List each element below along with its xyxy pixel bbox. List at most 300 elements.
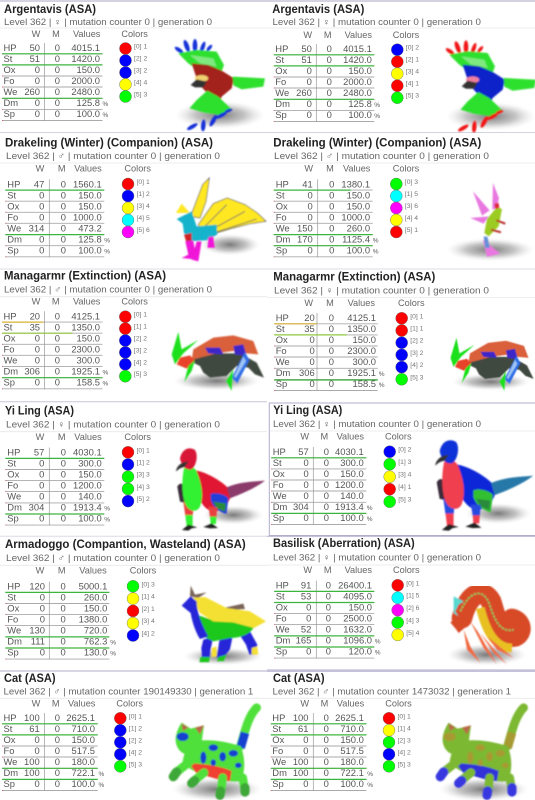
stats table: 150.0 (72, 734, 95, 745)
colour swatches: [1] 2 (136, 191, 150, 198)
panel: Armadoggo, male, left column (0, 536, 267, 670)
stats table: 1913.4 (335, 501, 364, 512)
colour swatches: [0] 1 (134, 312, 147, 319)
stats table: 0 (40, 647, 45, 658)
stats table (5, 581, 116, 660)
column headers: Colors (130, 566, 157, 576)
stats table: % (379, 371, 385, 378)
stats table: 0 (61, 211, 66, 222)
stats table: % (102, 380, 108, 387)
stats table: 170 (297, 233, 313, 244)
stats table: 0 (60, 614, 66, 625)
colour swatches: [5] 3 (398, 761, 411, 768)
stats table: 0 (55, 321, 60, 332)
column headers: Values (73, 29, 101, 39)
title: Yi Ling (ASA) (5, 405, 74, 417)
stats table: 0 (303, 490, 309, 501)
stats table: 0 (55, 53, 60, 64)
level line: Level 362 | ♂ | mutation counter 0 | generation 0 (4, 284, 212, 294)
stats table (5, 447, 110, 526)
stats table: 0 (309, 334, 315, 345)
stats table: 150.0 (349, 602, 372, 613)
stats table: % (367, 516, 373, 523)
stats table: 0 (39, 200, 44, 211)
stats table: 165 (296, 635, 311, 646)
stats table: % (102, 101, 108, 108)
stats table: 517.5 (340, 745, 364, 756)
stats table: 0 (60, 636, 66, 647)
stats table: 50 (301, 43, 312, 54)
stats table: 0 (303, 745, 308, 756)
stats table: 0 (61, 458, 66, 469)
stats table: Fo (276, 613, 287, 624)
stats table: 57 (298, 446, 309, 457)
stats table: 0 (329, 378, 334, 389)
stats table: 0 (39, 189, 44, 200)
stats table: 100.0 (340, 512, 364, 523)
colour swatches: [2] 2 (410, 338, 424, 345)
colour swatches: [0] 2 (398, 447, 412, 454)
stats table: 150.0 (340, 468, 364, 479)
column headers: Values (343, 164, 371, 174)
stats table: 0 (39, 513, 44, 524)
stats table: 2625.1 (66, 712, 95, 723)
stats table: 0 (324, 767, 329, 778)
stats table: We (275, 87, 289, 98)
stats table: 0 (303, 512, 309, 523)
panel: Cat, male, left column (0, 670, 267, 800)
stats table: 300.0 (77, 354, 100, 365)
colour swatches: [0] 1 (129, 713, 142, 720)
stats table: We (276, 624, 290, 635)
stats table: 0 (55, 376, 60, 387)
column headers: Colors (398, 298, 425, 308)
stats table: 0 (35, 108, 40, 119)
stats table: % (102, 112, 108, 119)
stats table: 0 (60, 592, 66, 603)
column headers (304, 298, 425, 308)
colour swatches (390, 178, 418, 238)
stats table: 150.0 (340, 734, 364, 745)
stats table: 0 (55, 64, 60, 75)
column headers: W (303, 565, 312, 575)
column headers: M (52, 699, 60, 709)
stats table: 0 (329, 211, 334, 222)
stats table: 35 (30, 321, 40, 332)
stats table: Fo (4, 75, 14, 86)
panel: Drakeling, male, right column (267, 133, 535, 267)
stats table: 0 (34, 734, 40, 745)
column headers: Values (337, 699, 365, 709)
stats table: Sp (276, 646, 287, 657)
stats table: % (104, 237, 110, 244)
stats table: 2000.0 (71, 75, 100, 86)
stats table: 0 (34, 778, 40, 789)
stats table: 0 (61, 502, 66, 513)
stats table: 2625.1 (335, 712, 364, 723)
colour swatches: [5] 3 (129, 761, 142, 768)
column headers (32, 297, 148, 307)
stats table: 150.0 (347, 200, 370, 211)
stats table: 100 (24, 756, 40, 767)
creature render: Argentavis (174, 39, 265, 132)
colour swatches: [3] 4 (136, 203, 150, 210)
column headers (304, 164, 420, 174)
stats table: We (4, 354, 17, 365)
column headers: Values (345, 565, 372, 575)
stats table: 2300.0 (347, 345, 376, 356)
stats table: 0 (35, 75, 40, 86)
stats table: 0 (39, 233, 44, 244)
colour swatches (119, 311, 147, 382)
column headers: Values (348, 298, 375, 308)
column headers (36, 432, 151, 442)
stats table: 0 (55, 756, 60, 767)
stats table: 0 (55, 310, 60, 321)
level line: Level 362 | ♀ | mutation counter 0 | generation 0 (272, 17, 481, 27)
colour swatches (391, 44, 419, 104)
colour swatches: [2] 1 (406, 57, 419, 64)
stats table: 53 (301, 591, 311, 602)
stats table: We (7, 222, 21, 233)
stats table: St (7, 592, 17, 603)
stats table: 0 (39, 458, 44, 469)
stats table: 0 (324, 712, 329, 723)
stats table: 0 (61, 447, 66, 458)
column headers: Values (74, 164, 102, 174)
stats table: 722.1 (72, 767, 95, 778)
stats table: 0 (309, 356, 315, 367)
stats table: 4030.1 (73, 447, 102, 458)
colour swatches: [0] 1 (136, 179, 150, 186)
stats table: 120.0 (349, 646, 372, 657)
stats table: 57 (34, 447, 44, 458)
stats table: 150.0 (78, 200, 102, 211)
column headers: Colors (121, 29, 148, 39)
stats table: 0 (55, 42, 60, 53)
column headers: M (52, 297, 60, 307)
stats table: 0 (55, 75, 60, 86)
stats table: 100 (24, 767, 40, 778)
stats table: 100.0 (347, 244, 370, 255)
title: Cat (ASA) (273, 673, 325, 685)
stats table (2, 42, 108, 121)
stats table: 0 (35, 97, 40, 108)
stats table: Dm (4, 97, 18, 108)
title: Managarmr (Extinction) (ASA) (4, 271, 166, 283)
stats table: We (276, 222, 290, 233)
stats table: Sp (7, 244, 19, 255)
stats table: 0 (324, 479, 329, 490)
stats table: % (374, 102, 380, 109)
stats table (274, 580, 381, 659)
title: Managarmr (Extinction) (ASA) (273, 271, 435, 283)
creature render: Cat (172, 708, 262, 800)
column headers: M (58, 432, 66, 442)
stats table: Ox (275, 65, 288, 76)
panel: Managarmr, female, right column (267, 267, 535, 401)
stats table: % (374, 113, 380, 120)
stats table: 0 (55, 767, 60, 778)
stats table: Dm (272, 767, 287, 778)
column headers: W (36, 566, 45, 576)
stats table: 0 (329, 222, 334, 233)
title: Drakeling (Winter) (Companion) (ASA) (5, 137, 213, 149)
stats table: We (272, 756, 286, 767)
stats table: 0 (40, 603, 45, 614)
stats table: 304 (293, 501, 309, 512)
colour swatches (392, 579, 420, 641)
column headers: Colors (385, 431, 412, 441)
column headers: W (32, 699, 41, 709)
stats table: 260.0 (347, 222, 370, 233)
panel: Managarmr, male, left column (0, 267, 267, 401)
stats table: 4125.1 (347, 312, 376, 323)
stats table: 314 (29, 222, 44, 233)
creature render: Armadoggo (182, 586, 266, 665)
stats table: St (276, 189, 285, 200)
stats table: 306 (24, 365, 40, 376)
level line: Level 362 | ♀ | mutation counter 0 | generation 0 (273, 552, 481, 562)
stats table: Sp (4, 778, 15, 789)
stats table: 0 (329, 200, 334, 211)
stats table: 130 (29, 625, 45, 636)
stats table: Fo (273, 479, 284, 490)
stats table: 150.0 (78, 469, 102, 480)
stats table: 0 (60, 603, 66, 614)
stats table: 0 (39, 211, 44, 222)
stats table: 120 (29, 581, 45, 592)
title: Argentavis (ASA) (272, 4, 364, 16)
stats table: St (4, 321, 13, 332)
stats table: 0 (60, 625, 66, 636)
column headers: W (300, 431, 309, 441)
column headers: Values (74, 432, 102, 442)
creature render: Managarmr (450, 338, 534, 391)
stats table: Fo (275, 76, 286, 87)
stats table: 100 (293, 712, 308, 723)
stats table: Sp (7, 647, 19, 658)
stats table: HP (7, 447, 20, 458)
stats table: Fo (7, 211, 18, 222)
stats table: 0 (61, 480, 66, 491)
stats table: We (4, 756, 17, 767)
level line: Level 362 | ♂ | mutation counter 1473032 | generation 1 (272, 686, 511, 696)
column headers: M (324, 30, 332, 40)
stats table: 0 (324, 490, 329, 501)
creature render: Managarmr (172, 332, 264, 391)
column headers: W (36, 164, 45, 174)
colour swatches: [1] 3 (398, 459, 412, 466)
stats table: Ox (4, 332, 16, 343)
stats table: 125.8 (78, 233, 102, 244)
colour swatches: [4] 2 (142, 630, 155, 637)
stats table: 0 (306, 602, 311, 613)
stats table: 762.3 (84, 636, 107, 647)
colour swatches (383, 712, 411, 772)
stats table: Ox (4, 734, 16, 745)
stats table: We (276, 356, 290, 367)
stats table: 100.0 (78, 513, 102, 524)
stats table: 1000.0 (341, 211, 370, 222)
colour swatches: [0] 1 (134, 44, 147, 50)
stats table: 0 (326, 646, 331, 657)
column headers: M (326, 298, 334, 308)
stats table: 61 (29, 723, 40, 734)
stats table: 0 (61, 513, 66, 524)
stats table: Dm (275, 98, 290, 109)
stats table: % (104, 517, 110, 524)
stats table: 5000.1 (79, 581, 107, 592)
stats table: 0 (326, 580, 331, 591)
stats table: 125.8 (77, 97, 100, 108)
colour swatches: [0] 1 (410, 313, 424, 320)
stats table: 0 (306, 646, 311, 657)
stats table: % (110, 651, 116, 658)
stats table: % (98, 771, 104, 778)
stats table: 300.0 (78, 458, 102, 469)
colour swatches: [4] 4 (134, 80, 147, 86)
column headers: Colors (393, 565, 420, 575)
stats table: Dm (4, 365, 18, 376)
stats table: St (4, 53, 13, 64)
column headers (36, 164, 151, 174)
column headers: Colors (121, 297, 148, 307)
stats table (271, 446, 373, 525)
stats table: 0 (40, 614, 45, 625)
stats table: 125.8 (348, 98, 372, 109)
stats table: Dm (7, 502, 22, 513)
column headers: Colors (124, 432, 151, 442)
stats table: 2500.0 (343, 613, 372, 624)
stats table: Sp (276, 378, 287, 389)
column headers: W (303, 30, 312, 40)
stats table: Ox (273, 468, 285, 479)
stats table (274, 43, 380, 122)
stats table: 0 (324, 734, 329, 745)
stats table: 1632.0 (343, 624, 372, 635)
stats table: 300.0 (340, 457, 364, 468)
column headers: W (32, 297, 41, 307)
stats table: 20 (304, 312, 315, 323)
stats table: 158.5 (77, 376, 100, 387)
stats table: 2300.0 (71, 343, 100, 354)
colour swatches: [3] 4 (142, 618, 155, 625)
stats table: 0 (307, 76, 312, 87)
stats table: % (379, 382, 385, 389)
stats table: 0 (306, 613, 311, 624)
stats table: Sp (275, 109, 287, 120)
title: Basilisk (Aberration) (ASA) (273, 538, 415, 550)
stats table: 0 (329, 189, 334, 200)
creature render: Yi Ling (176, 448, 265, 531)
stats table (271, 712, 373, 791)
stats table: 517.5 (72, 745, 95, 756)
colour swatches: [5] 3 (410, 374, 424, 381)
stats table: 180.0 (72, 756, 95, 767)
stats table: 0 (309, 378, 315, 389)
stats table: 52 (301, 624, 311, 635)
level line: Level 362 | ♂ | mutation counter 190149330 | generation 1 (4, 686, 253, 696)
stats table: 0 (324, 723, 329, 734)
stats table: Fo (4, 343, 14, 354)
stats table: % (110, 640, 116, 647)
column headers: Colors (124, 164, 151, 174)
colour swatches: [3] 3 (136, 472, 150, 479)
column headers (32, 29, 148, 39)
column headers (300, 699, 412, 709)
stats table (2, 310, 108, 389)
creature render: Basilisk (447, 593, 527, 665)
stats table: 260 (296, 87, 312, 98)
stats table: Fo (272, 745, 283, 756)
colour swatches: [4] 2 (410, 362, 424, 369)
stats table: 140.0 (78, 491, 102, 502)
column headers: M (326, 164, 334, 174)
colour swatches: [5] 3 (398, 497, 412, 504)
stats table: 0 (307, 211, 313, 222)
level line: Level 362 | ♂ | mutation counter 0 | generation 0 (274, 151, 489, 161)
stats table: 304 (29, 502, 44, 513)
stats table: 0 (61, 222, 66, 233)
stats table: 0 (329, 345, 334, 356)
stats table: 1000.0 (73, 211, 102, 222)
stats table: % (373, 237, 379, 244)
stats table: We (7, 625, 21, 636)
stats table: 1380.1 (341, 178, 370, 189)
stats table: 0 (326, 613, 331, 624)
stats table: 111 (31, 636, 45, 647)
stats table: We (273, 490, 287, 501)
stats table: HP (4, 712, 17, 723)
creature render: Drakeling (yellow wings) (176, 178, 266, 261)
level line: Level 362 | ♀ | mutation counter 0 | generation 0 (274, 285, 489, 295)
stats table: 0 (324, 756, 329, 767)
stats table: Sp (4, 108, 15, 119)
colour swatches: [5] 3 (406, 93, 419, 100)
stats table: 0 (61, 200, 66, 211)
stats table: 0 (55, 723, 60, 734)
stats table: 100 (293, 767, 308, 778)
stats table: St (4, 723, 13, 734)
stats table: Fo (4, 745, 14, 756)
stats table: 158.5 (353, 378, 376, 389)
stats table: % (367, 782, 373, 789)
stats table: 0 (55, 365, 60, 376)
stats table: 4015.1 (71, 42, 100, 53)
stats table: 1350.0 (71, 321, 100, 332)
stats table: 1380.0 (79, 614, 107, 625)
stats table: 0 (307, 244, 313, 255)
stats table: We (4, 86, 17, 97)
stats table: 100 (24, 712, 40, 723)
stats table: Dm (276, 233, 290, 244)
stats table (2, 712, 104, 791)
stats table: 150.0 (78, 189, 102, 200)
stats table: We (7, 491, 21, 502)
stats table: Dm (7, 636, 22, 647)
stats table: % (104, 248, 110, 255)
stats table: Fo (276, 211, 287, 222)
colour swatches: [1] 2 (129, 725, 142, 732)
stats table: 0 (35, 64, 40, 75)
column headers: W (300, 699, 309, 709)
colour swatches (384, 446, 412, 508)
stats table: 0 (326, 624, 331, 635)
stats table: Fo (7, 480, 18, 491)
stats table: Sp (7, 513, 19, 524)
stats table: 0 (61, 233, 66, 244)
